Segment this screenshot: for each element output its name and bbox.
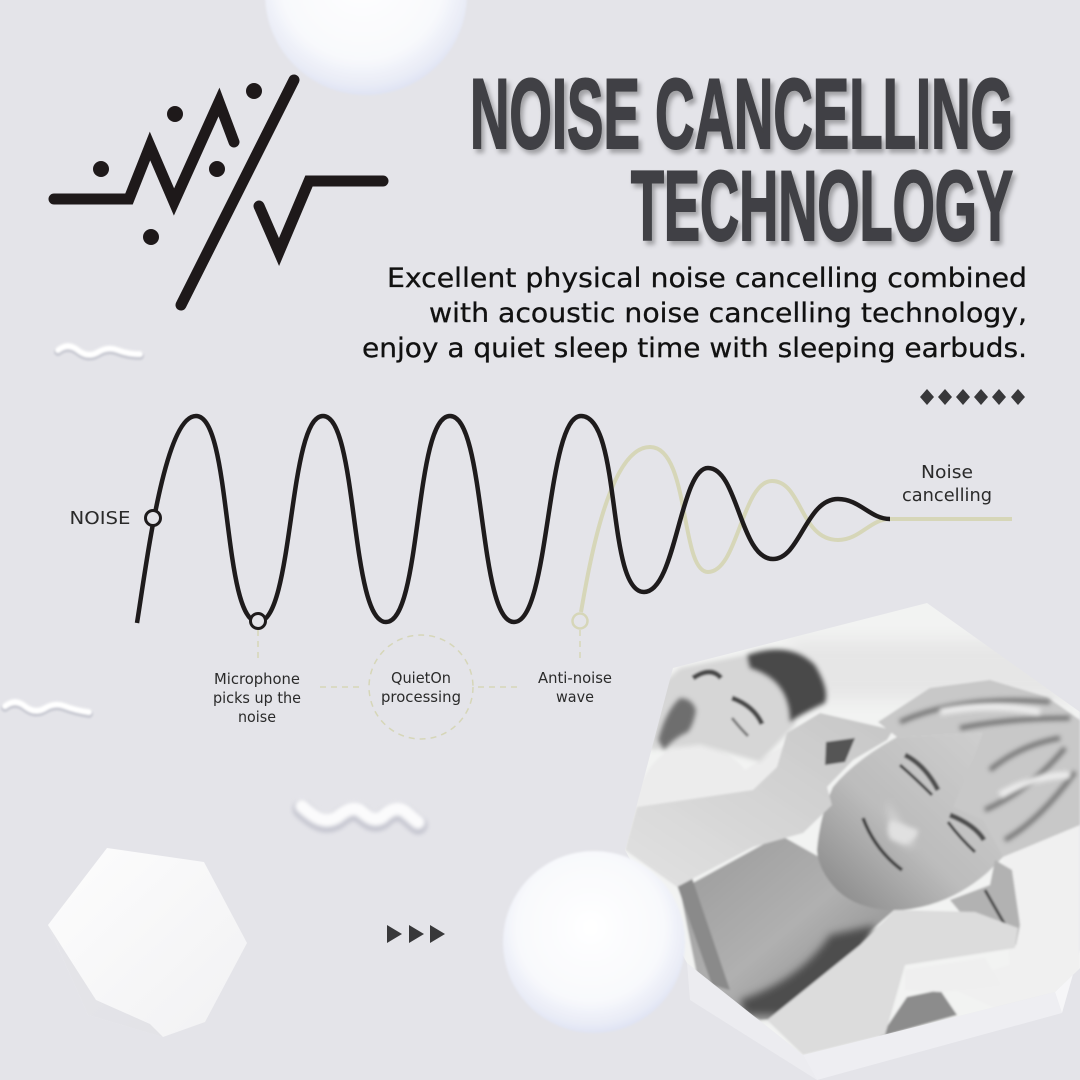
woman: raised arm and hand (625, 713, 893, 887)
decorative sphere: top (265, 0, 467, 95)
title: TECHNOLOGY (631, 151, 1013, 261)
description text (362, 263, 1027, 364)
woman: eyes and brows (905, 755, 984, 840)
man: face (650, 655, 795, 762)
diagram labels: processing (381, 688, 461, 706)
decorative sphere: bottom (503, 851, 685, 1033)
decorative triangles (387, 925, 445, 943)
diagram labels: NOISE (70, 508, 130, 529)
diagram labels: Noise (921, 462, 973, 483)
man: shoulder (625, 720, 830, 850)
diagram labels: picks up the (213, 689, 301, 707)
woman: lower fingers (950, 860, 1020, 945)
woman: mouth (863, 818, 902, 870)
diagram labels: Microphone (214, 670, 300, 688)
title: NOISE CANCELLING (470, 59, 1013, 169)
decorative squiggles (5, 346, 418, 825)
hair dark streaks (900, 701, 1075, 840)
anti-noise wave (581, 447, 1012, 612)
dashed connectors (258, 630, 580, 739)
man: lower eye line (732, 718, 748, 736)
diagram labels: wave (556, 688, 594, 706)
man: closed eye and brow (693, 672, 762, 724)
markers (146, 510, 588, 628)
wave diagram (70, 416, 1012, 739)
diagram labels: noise (238, 708, 276, 726)
photo: couple in bed (620, 600, 1080, 1080)
description text: Excellent physical noise cancelling combined (387, 263, 1027, 294)
dark gap below arm (880, 990, 957, 1037)
pillow (1029, 824, 1080, 846)
woman: nose highlight (888, 810, 914, 848)
white fingers under arm (934, 989, 942, 994)
photo hexagon side faces (687, 950, 1080, 1080)
woman: lashes (900, 765, 975, 852)
decorative hexagon (48, 848, 247, 1037)
woman: hair below (740, 925, 875, 1015)
diagram labels (70, 462, 992, 726)
man: nose and mouth shadow (658, 698, 696, 750)
woman: hair (878, 680, 1080, 857)
woman: top (677, 878, 730, 990)
description text: enjoy a quiet sleep time with sleeping earbuds. (362, 333, 1027, 364)
decorative diamonds (920, 389, 1025, 405)
diagram labels: QuietOn (391, 669, 451, 687)
icon: noise wave (54, 80, 383, 305)
diagram labels: cancelling (902, 485, 992, 506)
woman: face (817, 733, 1003, 910)
woman: nose (888, 820, 918, 844)
man: hair (747, 649, 826, 722)
description text: with acoustic noise cancelling technology, (429, 298, 1027, 329)
woman: lower arm (767, 910, 1018, 1055)
hand gap shadow (825, 738, 855, 765)
photo content (620, 600, 1080, 1080)
hair highlights (940, 707, 1070, 795)
diagram labels: Anti-noise (538, 669, 612, 687)
woman: chest and neck (680, 835, 900, 1020)
title (470, 59, 1013, 261)
noise wave (137, 416, 890, 623)
finger shadow (985, 890, 1005, 925)
